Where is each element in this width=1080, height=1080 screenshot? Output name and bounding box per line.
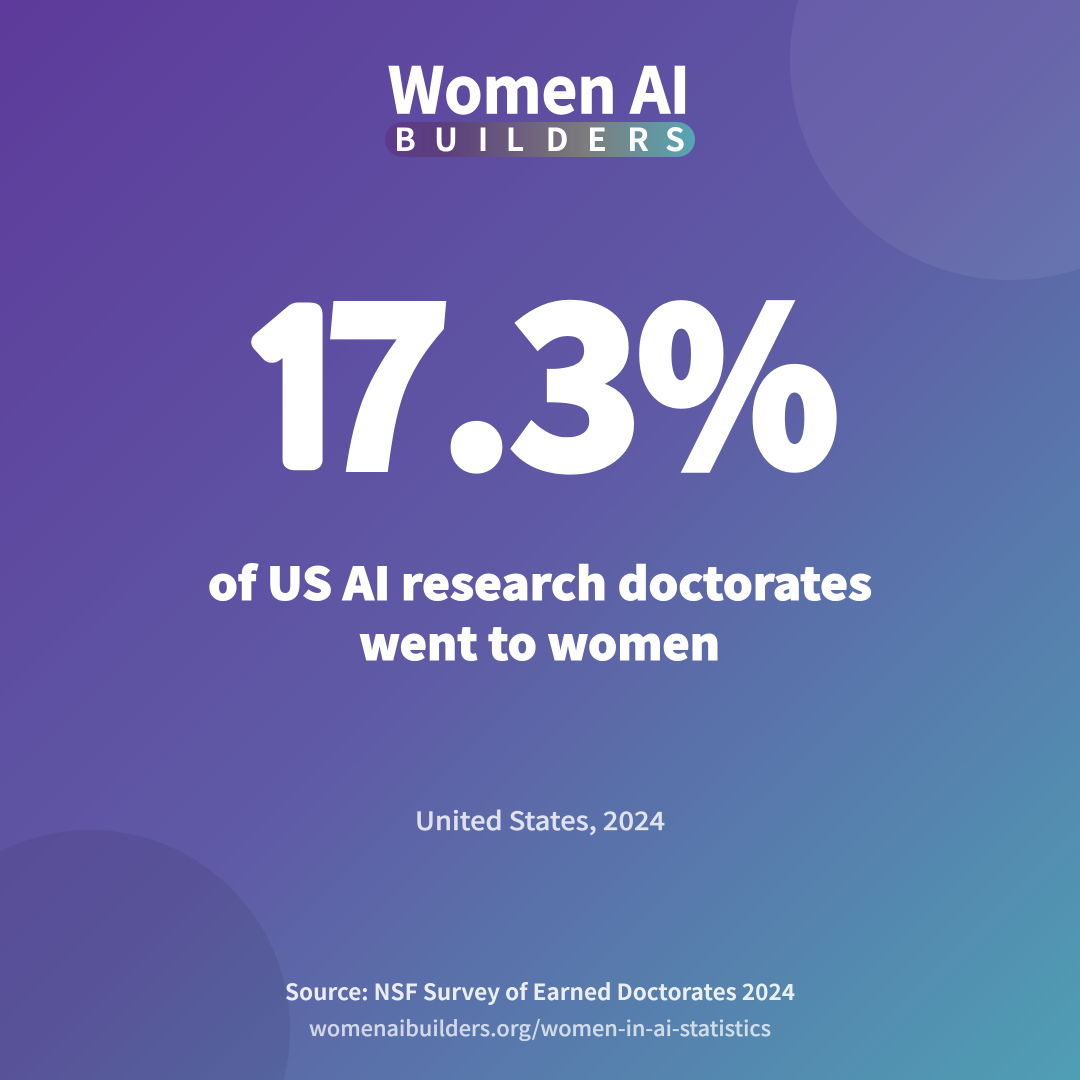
logo pill <box>385 122 695 157</box>
decorative circle: bottom left <box>0 830 290 1080</box>
big statistic: 17.3%: 1 <box>232 295 364 493</box>
location and year: United States, 2024 <box>415 802 665 838</box>
logo wordmark: Women AI <box>388 41 690 132</box>
headline line 1: of US AI research doctorates <box>208 548 872 613</box>
website url: womenaibuilders.org/women-in-ai-statistics <box>309 1013 771 1043</box>
source line: Source: NSF Survey of Earned Doctorates 2024 <box>285 975 795 1007</box>
big statistic: 17.3%: . <box>436 208 517 534</box>
logo subtitle: BUILDERS <box>394 115 685 161</box>
big statistic: 17.3%: 3 <box>508 208 644 534</box>
headline line 2: went to women <box>359 608 720 673</box>
logo: Women AI Builders <box>385 41 695 161</box>
big statistic: 17.3%: % <box>637 219 839 528</box>
big statistic: 17.3%: 7 <box>304 204 463 537</box>
headline <box>208 548 872 673</box>
decorative circle: top right <box>790 0 1080 280</box>
big statistic: 17.3% <box>232 204 839 537</box>
